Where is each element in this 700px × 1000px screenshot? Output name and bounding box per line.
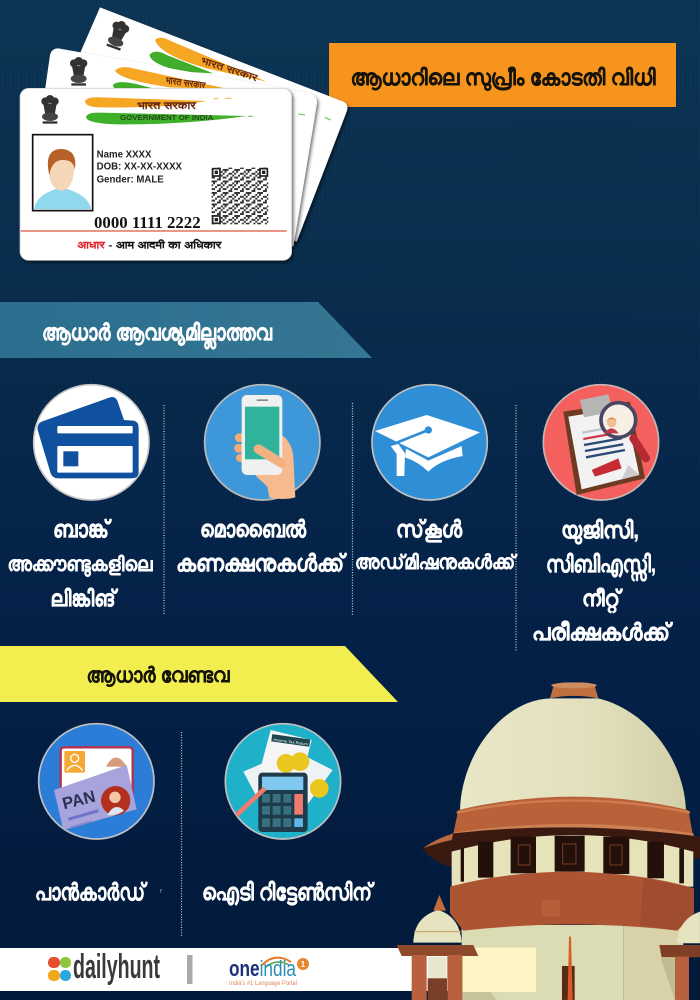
label: bank: ലിങ്കിങ് — [50, 586, 118, 611]
banner: not required: ആധാർ ആവശ്യമില്ലാത്തവ — [42, 320, 273, 350]
label: mobile — [176, 516, 348, 576]
label: exams: യുജിസി, — [561, 517, 639, 545]
identity text: Name XXXX — [97, 149, 152, 160]
tricolour bands — [85, 97, 207, 107]
logo: oneindia: 1 — [301, 960, 306, 969]
label: exams — [532, 517, 674, 645]
label: mobile: മൊബൈൽ — [200, 516, 307, 542]
dome — [460, 698, 686, 812]
icon: tax calculator — [225, 724, 341, 839]
middle aadhaar card — [45, 48, 317, 247]
icon: pan card: PAN — [60, 787, 97, 813]
label: it returns: ഐടി റിട്ടേൺസിന് — [202, 879, 375, 906]
logo divider — [187, 955, 192, 984]
label: school — [355, 516, 518, 574]
label: exams: പരീക്ഷകൾക്ക് — [532, 619, 674, 645]
icon: tax calculator: Income Tax Return — [273, 738, 308, 747]
back aadhaar card — [80, 7, 347, 242]
illustration: aadhaar cards — [20, 7, 347, 260]
right small dome — [659, 912, 700, 1000]
emblem — [41, 95, 59, 124]
logo: oneindia: India's #1 Language Portal — [229, 980, 297, 987]
icon: graduation cap — [372, 385, 487, 500]
title box: ആധാറിലെ സുപ്രീം കോടതി വിധി — [350, 65, 656, 92]
icon: mobile in hand — [205, 385, 320, 500]
front aadhaar card: भारत सरकार — [136, 101, 197, 112]
front aadhaar card — [20, 88, 292, 260]
label: bank — [8, 516, 153, 611]
dome cap — [550, 683, 598, 698]
banner: not required — [0, 302, 372, 358]
lower wall — [462, 925, 623, 1000]
window drum — [452, 835, 693, 887]
banner: required — [0, 646, 398, 702]
label: exams: സിബിഎസ്സി, — [546, 551, 656, 582]
middle aadhaar card: भारत सरकार — [164, 75, 207, 92]
divider lines — [164, 403, 516, 936]
stray mark: r — [160, 888, 163, 895]
stone band — [453, 797, 693, 833]
logo: oneindia: oneindia — [229, 956, 297, 981]
label: school: സ്‌കൂൾ — [396, 516, 463, 543]
flag pole — [562, 937, 575, 1000]
label: school: അഡ്‌മിഷനുകൾക്ക് — [355, 551, 518, 574]
label: pan card: പാൻകാർഡ് — [35, 879, 148, 905]
footer band — [0, 948, 480, 991]
icon: exam clipboard — [543, 385, 659, 500]
logo: dailyhunt — [48, 948, 160, 986]
label: bank: അക്കൗണ്ടുകളിലെ — [8, 553, 153, 577]
pale footer overlay — [463, 948, 536, 992]
front aadhaar card: DOB: XX-XX-XXXX — [97, 162, 183, 173]
left small dome — [397, 895, 478, 1000]
label: mobile: കണക്ഷനുകൾക്ക് — [176, 550, 348, 576]
title box — [329, 43, 676, 107]
illustration: supreme court building — [397, 682, 700, 1000]
eaves — [423, 827, 700, 867]
label: bank: ബാങ്ക് — [53, 516, 112, 542]
front aadhaar card: GOVERNMENT OF INDIA — [120, 115, 213, 122]
banner: required: ആധാർ വേണ്ടവ — [86, 664, 230, 688]
logo: dailyhunt: dailyhunt — [73, 948, 160, 986]
aadhaar number: 0000 1111 2222 — [94, 213, 201, 232]
back aadhaar card: भारत सरकार — [199, 55, 259, 84]
qr code — [212, 168, 268, 224]
brick drum — [450, 872, 694, 931]
icon: pan card — [39, 724, 154, 839]
icon: bank cards — [34, 385, 149, 500]
photo — [33, 135, 93, 211]
card slogan: आधार - आम आदमी का अधिकार — [77, 239, 222, 252]
front aadhaar card: Gender: MALE — [97, 174, 164, 185]
label: exams: നീറ്റ് — [582, 586, 623, 614]
